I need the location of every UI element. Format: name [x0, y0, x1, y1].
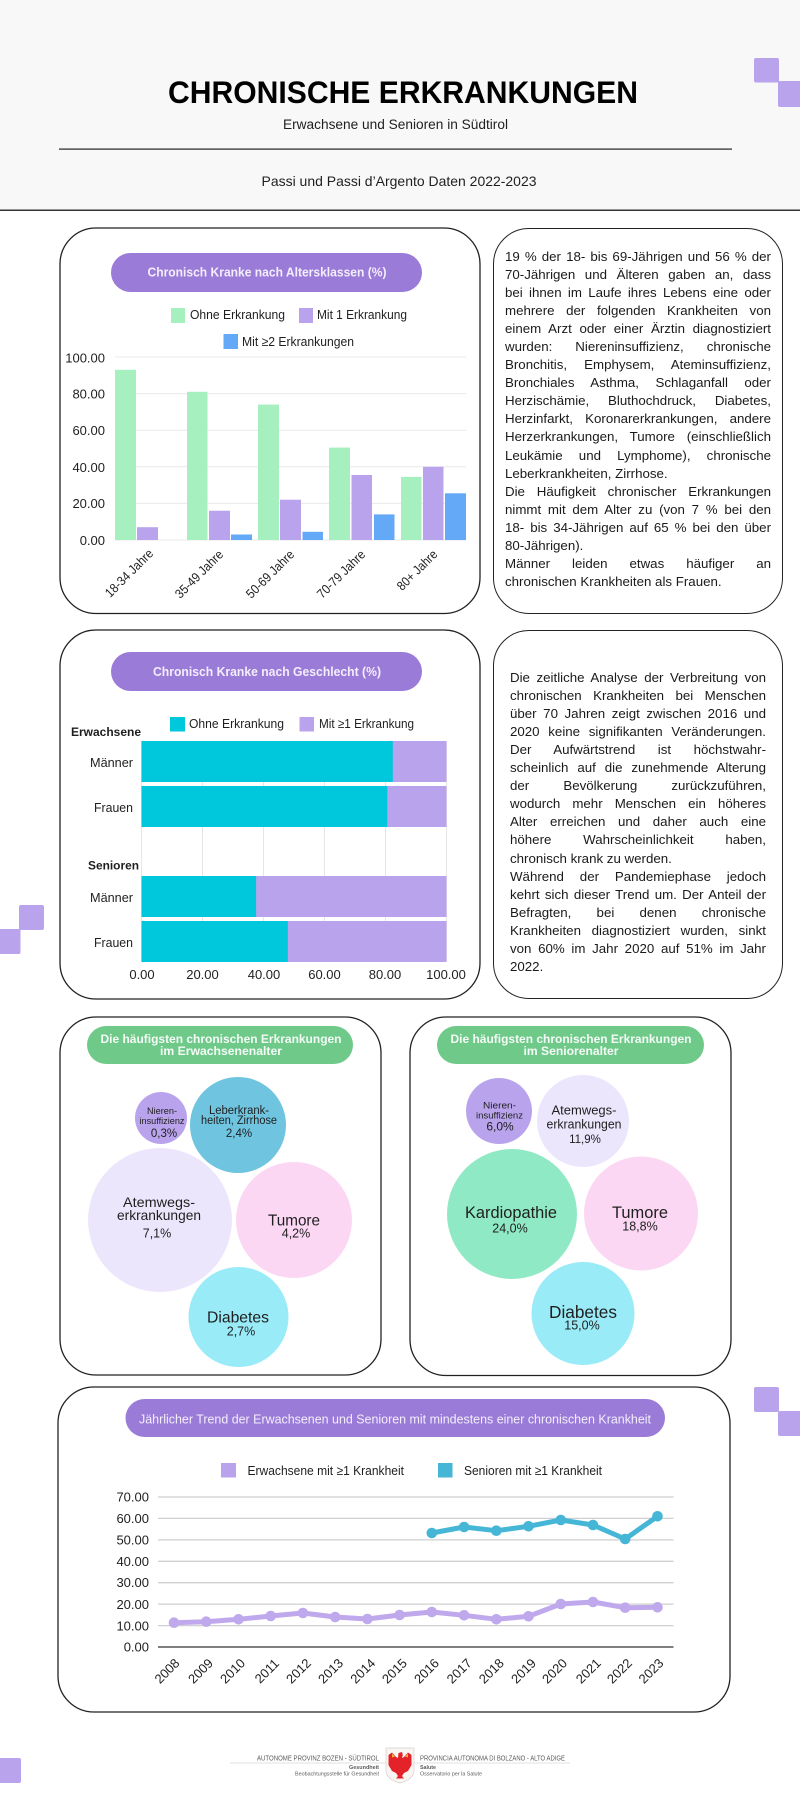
bar chart: chronic illness by age group: 70-79 Jahre [314, 547, 368, 601]
icon: coat of arms [386, 1748, 414, 1783]
line chart: yearly trend: 2010 [217, 1655, 248, 1687]
bar chart: chronic illness by gender: Frauen [94, 935, 133, 950]
header band [0, 0, 800, 211]
decoration: bottom left square [0, 1758, 21, 1783]
bubble: Kardiopathie seniors: Kardiopathie [465, 1203, 557, 1222]
bubble: Atemwegserkrankungen seniors: Atemwegs- [552, 1104, 616, 1118]
bubble: Atemwegserkrankungen adults: 7,1% [143, 1226, 171, 1240]
bubble: Diabetes adults [188, 1267, 288, 1367]
line chart: yearly trend: 2016 [411, 1655, 442, 1687]
text block: frequency description: Leukämie und Lymphome), chronische [505, 448, 771, 463]
bar chart: chronic illness by gender: Frauen [94, 800, 133, 815]
bubble: Niereninsuffizienz seniors: Nieren- [483, 1100, 516, 1112]
bubble: Atemwegserkrankungen seniors [537, 1075, 629, 1167]
line chart: yearly trend: 60.00 [116, 1511, 149, 1526]
text block: frequency description: Männer leiden etwas häufiger an [505, 556, 771, 571]
text block: temporal analysis: der Bevölkerung zurückzuführen, [510, 778, 766, 793]
heading pill: adults: im Erwachsenenalter [160, 1044, 282, 1058]
legend: age group chart: Mit 1 Erkrankung [317, 307, 407, 322]
bar chart: chronic illness by gender [71, 725, 466, 982]
text block: frequency description: Herzischämie, Bluthochdruck, Diabetes, [505, 393, 771, 408]
bubble: Diabetes seniors: 15,0% [564, 1318, 600, 1332]
logo text: Italian: PROVINCIA AUTONOMA DI BOLZANO - ALTO ADIGE [420, 1754, 565, 1762]
bubble: Niereninsuffizienz seniors: 6,0% [486, 1120, 514, 1134]
text block: frequency description: Bronchitis, Emphysem, Ateminsuffizienz, [505, 357, 771, 372]
bar chart: chronic illness by gender: 0.00 [129, 967, 155, 982]
line chart: yearly trend: 2017 [444, 1655, 475, 1687]
heading pill: age group chart: Chronisch Kranke nach Altersklassen (%) [148, 266, 386, 280]
bar chart: chronic illness by age group [65, 350, 466, 601]
text block: temporal analysis: Die zeitliche Analyse der Verbreitung von [510, 670, 766, 685]
bar chart: chronic illness by age group: 20.00 [72, 496, 105, 511]
heading pill: gender chart: Chronisch Kranke nach Geschlecht (%) [153, 665, 381, 679]
line chart: yearly trend: 70.00 [116, 1490, 149, 1504]
bar chart: chronic illness by age group: 100.00 [65, 350, 105, 366]
bar chart: chronic illness by gender: Männer [90, 755, 134, 770]
line chart: yearly trend: 0.00 [124, 1640, 149, 1654]
line chart: yearly trend: 2015 [379, 1655, 410, 1687]
bar chart: chronic illness by gender: 100.00 [426, 967, 466, 982]
logo text: Italian: Salute [420, 1765, 436, 1771]
text block: temporal analysis: Der Aufwärtstrend ist höchstwahr- [510, 742, 766, 757]
bubble: Atemwegserkrankungen adults [88, 1148, 232, 1292]
bubble: Leberkrankheiten adults: heiten, Zirrhose [201, 1115, 277, 1127]
text block: frequency description: mehrere der folgenden Krankheiten von [505, 303, 771, 318]
heading pill: seniors [437, 1026, 704, 1064]
logo text: German: Beobachtungsstelle für Gesundheit [295, 1772, 379, 1778]
text block: frequency description: 19 % der 18- bis 69-Jährigen und 56 % der [505, 248, 771, 264]
data source line: Passi und Passi d’Argento Daten 2022-2023 [262, 173, 537, 189]
bar chart: chronic illness by age group: 80+ Jahre [394, 547, 440, 593]
line chart: yearly trend: 2008 [151, 1655, 183, 1687]
logo text: Italian [420, 1754, 565, 1778]
heading pill: adults: Die häufigsten chronischen Erkrankungen [100, 1032, 342, 1046]
bar chart: chronic illness by age group: 40.00 [72, 460, 105, 475]
bubble: Tumore seniors [584, 1156, 698, 1270]
line chart: yearly trend: 2013 [315, 1655, 346, 1687]
bar chart: chronic illness by gender: 80.00 [369, 967, 401, 982]
bar chart: chronic illness by age group: 50-69 Jahre [243, 547, 297, 601]
text block: temporal analysis: wodurch mehr Menschen ein höheres [510, 796, 766, 811]
legend: age group chart: Ohne Erkrankung [190, 307, 285, 322]
bubble: Diabetes adults: 2,7% [227, 1324, 255, 1338]
logo text: Italian: Osservatorio per la Salute [420, 1772, 482, 1778]
bubble: Tumore adults: Tumore [268, 1212, 320, 1230]
footer logo [230, 1748, 570, 1783]
legend: gender chart: Mit ≥1 Erkrankung [319, 716, 414, 731]
logo text: German: Gesundheit [349, 1765, 379, 1771]
bar chart: chronic illness by age group: 0.00 [80, 533, 105, 548]
text block: frequency description: 70-Jährigen und Älteren gaben an, dass [505, 267, 771, 282]
bubble: Diabetes seniors [532, 1262, 634, 1365]
panel: most frequent diseases in seniors [410, 1017, 731, 1376]
bubble: Diabetes seniors: Diabetes [549, 1302, 617, 1322]
text block: temporal analysis: scheinlich auf die zunehmende Alterung [510, 760, 766, 775]
panel: most frequent diseases in adults [60, 1017, 381, 1375]
series: seniors [426, 1511, 663, 1544]
legend: trend [221, 1463, 602, 1478]
line chart: yearly trend: 2011 [252, 1656, 282, 1686]
bubble: Niereninsuffizienz seniors: insuffizienz [476, 1110, 523, 1122]
legend: trend: Senioren mit ≥1 Krankheit [464, 1463, 602, 1478]
bar chart: chronic illness by age group: 60.00 [72, 423, 105, 438]
line chart: yearly trend: 2020 [539, 1655, 570, 1687]
panel: yearly trend [58, 1387, 730, 1712]
text block: frequency description: Bronchiales Asthma, Schlaganfall oder [505, 375, 771, 390]
legend: gender chart [170, 716, 414, 732]
bubble: Leberkrankheiten adults [190, 1077, 286, 1173]
line chart: yearly trend: 2009 [185, 1655, 216, 1687]
legend: trend: Erwachsene mit ≥1 Krankheit [248, 1463, 404, 1478]
bubble: Tumore seniors: 18,8% [622, 1220, 658, 1234]
bubble: Niereninsuffizienz adults: 0,3% [151, 1128, 177, 1140]
line chart: yearly trend: 2022 [604, 1655, 635, 1687]
text block: frequency description: bei ihnen im Laufe ihres Lebens eine oder [505, 285, 771, 300]
bar chart: chronic illness by gender: 60.00 [308, 967, 341, 982]
decoration: top right squares [754, 58, 800, 107]
bar chart: chronic illness by age group: 18-34 Jahre [102, 546, 156, 600]
text block: temporal analysis: 2020 keine signifikanten Veränderungen. [510, 724, 766, 739]
line chart: yearly trend: 2012 [283, 1655, 314, 1687]
line chart: yearly trend: 20.00 [116, 1597, 149, 1612]
panel: chronically ill by gender [60, 630, 480, 999]
text block: frequency description: Die Häufigkeit chronischer Erkrankungen [505, 484, 771, 499]
bar chart: chronic illness by gender: Erwachsene [71, 725, 141, 739]
heading pill: gender chart [111, 652, 422, 691]
bubble: Leberkrankheiten adults: Leberkrank- [209, 1105, 269, 1117]
text block: frequency description: 18- bis 34-Jährigen auf 65 % bei den über [505, 520, 771, 535]
bubble: Kardiopathie seniors: 24,0% [492, 1222, 528, 1236]
text block: temporal analysis: über 70 Jahren zeigt zwischen 2016 und [510, 706, 766, 721]
bubble: Niereninsuffizienz seniors [466, 1078, 532, 1144]
text block: frequency description: Leberkrankheiten, Zirrhose. [505, 466, 668, 481]
bubble: Niereninsuffizienz adults: insuffizienz [140, 1116, 185, 1126]
text block: frequency description: nimmt mit dem Alter zu (von 7 % bei den [505, 502, 771, 517]
text block: temporal analysis: kehrt sich dieser Trend um. Der Anteil der [510, 887, 766, 902]
text block: temporal analysis: Alter erreichen und daher auch eine [510, 814, 766, 829]
text block: frequency description: wurden: Niereninsuffizienz, chronische [505, 339, 771, 354]
panel: text on chronic illness frequency [493, 228, 783, 614]
text block: frequency description: Herzinfarkt, Koronarerkrankungen, andere [505, 411, 771, 426]
bubble: Atemwegserkrankungen adults: erkrankungen [117, 1207, 201, 1223]
logo text: German: AUTONOME PROVINZ BOZEN - SÜDTIROL [257, 1754, 379, 1762]
panel: chronically ill by age group [60, 228, 480, 614]
text block: temporal analysis: chronischen Krankheiten bei Menschen [510, 688, 766, 703]
line chart: yearly trend: 2019 [508, 1655, 539, 1687]
heading pill: trend: Jährlicher Trend der Erwachsenen und Senioren mit mindestens einer chronischen Krankheit [139, 1412, 652, 1426]
bubble: Atemwegserkrankungen adults: Atemwegs- [123, 1194, 195, 1210]
bubble: Atemwegserkrankungen seniors: 11,9% [569, 1134, 601, 1146]
bar chart: chronic illness by gender: 40.00 [248, 967, 280, 982]
heading pill: seniors: Die häufigsten chronischen Erkrankungen [450, 1032, 692, 1046]
bubble: Tumore adults [236, 1162, 352, 1278]
legend: gender chart: Ohne Erkrankung [189, 716, 284, 731]
decoration: left squares [0, 905, 44, 954]
bar chart: chronic illness by gender: Senioren [88, 858, 139, 872]
logo text: German [257, 1754, 379, 1778]
text block: temporal analysis: Befragten, bei denen chronische [510, 905, 766, 920]
heading pill: adults [87, 1026, 353, 1064]
bubble: Kardiopathie seniors [447, 1149, 577, 1279]
line chart: yearly trend: 2021 [573, 1655, 604, 1687]
bubble: Diabetes adults: Diabetes [207, 1310, 269, 1326]
text block: frequency description: Herzerkrankungen, Tumore (einschließlich [505, 429, 771, 444]
text block: temporal analysis: von 60% im Jahr 2020 auf 51% im Jahr [510, 941, 766, 956]
panel: text on temporal analysis [493, 630, 783, 999]
bubble: Niereninsuffizienz adults [135, 1092, 187, 1144]
line chart: yearly trend: 2014 [347, 1655, 378, 1687]
bar chart: chronic illness by gender: 20.00 [186, 967, 219, 982]
bar chart: chronic illness by gender: Männer [90, 890, 134, 905]
text block: frequency description: chronischen Krankheiten als Frauen. [505, 574, 722, 589]
line chart: yearly trend: 30.00 [116, 1575, 149, 1590]
line chart: yearly trend: 40.00 [116, 1554, 149, 1569]
text block: frequency description: einem Arzt oder einer Ärztin diagnostiziert [505, 321, 771, 336]
bar chart: chronic illness by age group: 80.00 [72, 386, 105, 402]
decoration: lower right squares [754, 1387, 800, 1436]
bubble: Atemwegserkrankungen seniors: erkrankungen [546, 1118, 622, 1132]
bubble: Leberkrankheiten adults: 2,4% [226, 1128, 252, 1140]
text block: temporal analysis [510, 670, 766, 974]
line chart: yearly trend: 2018 [476, 1655, 507, 1687]
text block: temporal analysis: 2022. [510, 959, 543, 974]
heading pill: age group chart [111, 253, 422, 292]
subtitle: Erwachsene und Senioren in Südtirol [283, 117, 508, 132]
text block: frequency description [505, 248, 771, 589]
bubble: Tumore seniors: Tumore [612, 1203, 668, 1222]
legend: age group chart [171, 307, 407, 349]
text block: frequency description: 80-Jährigen). [505, 538, 583, 553]
line chart: yearly trend: 50.00 [116, 1532, 149, 1548]
title: CHRONISCHE ERKRANKUNGEN [168, 74, 638, 110]
bar chart: chronic illness by age group: 35-49 Jahre [172, 547, 226, 601]
text block: temporal analysis: höhere Wahrscheinlichkeit haben, [510, 832, 766, 847]
legend: age group chart: Mit ≥2 Erkrankungen [242, 334, 354, 349]
text block: temporal analysis: Während der Pandemiephase jedoch [510, 869, 766, 884]
text block: temporal analysis: chronisch krank zu werden. [510, 851, 672, 866]
heading pill: seniors: im Seniorenalter [524, 1044, 619, 1058]
series: adults [169, 1597, 663, 1628]
text block: temporal analysis: Krankheiten diagnostiziert wurden, sinkt [510, 923, 766, 938]
line chart: yearly trend: 2023 [635, 1655, 667, 1687]
bubble: Tumore adults: 4,2% [282, 1226, 310, 1240]
line chart: yearly trend: 10.00 [116, 1618, 149, 1634]
line chart: yearly trend [116, 1490, 674, 1687]
heading pill: trend [126, 1399, 665, 1437]
bubble: Niereninsuffizienz adults: Nieren- [147, 1106, 177, 1116]
